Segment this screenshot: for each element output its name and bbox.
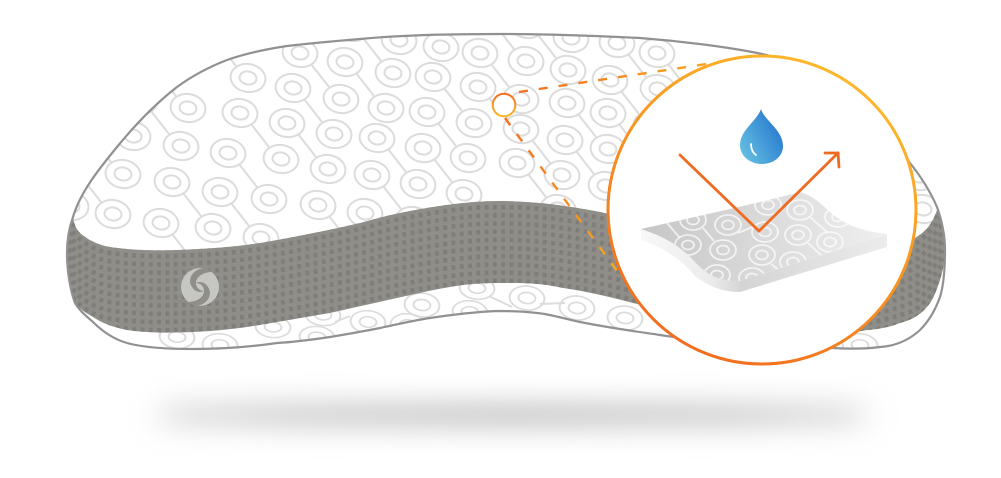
bottom rim rings <box>158 283 878 348</box>
fabric ring pattern <box>68 32 945 354</box>
magnified callout circle <box>608 56 916 364</box>
pillow body <box>67 34 945 349</box>
grey mesh band <box>68 201 944 333</box>
callout dashed lines <box>505 62 720 275</box>
swatch left side <box>641 229 740 292</box>
swirl logo <box>181 268 219 306</box>
ground shadow <box>160 402 865 428</box>
swatch right side <box>740 234 887 292</box>
swatch top face <box>641 192 887 281</box>
pillow outline <box>67 34 945 349</box>
callout origin marker <box>493 94 515 116</box>
fabric swatch <box>641 192 887 292</box>
pillow <box>66 32 946 350</box>
swatch ring pattern <box>666 198 848 281</box>
deflection arrow <box>680 153 839 231</box>
water drop icon <box>740 109 783 164</box>
